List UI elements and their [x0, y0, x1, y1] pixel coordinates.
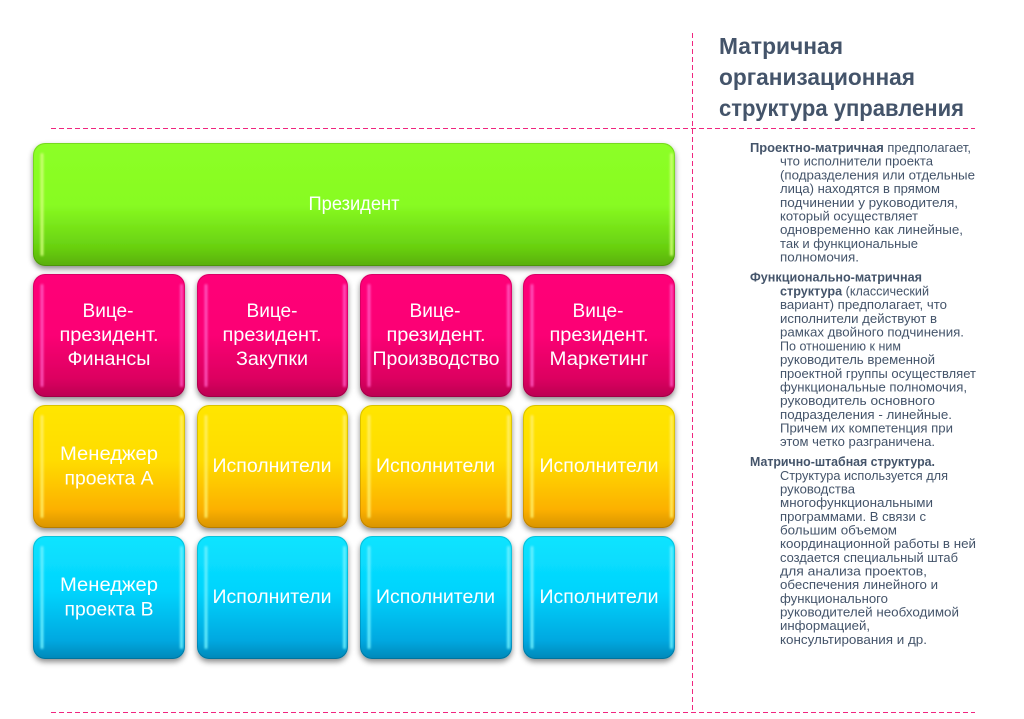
box: Project manager B [33, 536, 185, 659]
box: Executors row B col 4 [523, 536, 675, 659]
box: VP Production: президент. [386, 325, 486, 346]
box: Project manager A [33, 405, 185, 528]
box: President: Президент [308, 194, 400, 215]
text block: project matrix: полномочия. [780, 250, 859, 264]
text block: project matrix: одновременно как линейные, [780, 223, 963, 237]
text block: functional matrix [750, 270, 976, 449]
text block: functional matrix: вариант) предполагает, что [780, 298, 947, 312]
box: VP Finance: президент. [60, 325, 158, 346]
box: VP Finance: Финансы [68, 349, 150, 370]
box: Project manager A: Менеджер [60, 444, 158, 465]
box: VP Production [360, 274, 512, 397]
box: VP Purchasing: Вице- [246, 301, 298, 322]
text block: functional matrix: Функционально-матричная [750, 270, 922, 284]
text block: matrix-staff: консультирования и др. [780, 633, 927, 647]
title: организационная [719, 64, 915, 90]
text block: matrix-staff: руководителей необходимой [780, 606, 959, 620]
box: Executors row B col 2 [197, 536, 348, 659]
text block: matrix-staff: функционального [780, 592, 888, 606]
box: VP Marketing [523, 274, 675, 397]
text block: functional matrix: функциональные полномочия, [780, 380, 967, 394]
text block: functional matrix: руководитель временной [780, 353, 935, 367]
text block: matrix-staff: программами. В связи с [780, 510, 926, 524]
text block: matrix-staff: большим объемом [780, 524, 897, 538]
box: Executors row A col 3: Исполнители [376, 456, 495, 477]
text block: functional matrix: рамках двойного подчинения. [780, 326, 964, 340]
text block: functional matrix: По отношению к ним [780, 340, 901, 354]
box: VP Finance [33, 274, 185, 397]
text block: project matrix: который осуществляет [780, 210, 918, 224]
text block: functional matrix: Причем их компетенция при [780, 422, 953, 436]
box: Executors row A col 3 [360, 405, 512, 528]
text block: project matrix: (подразделения или отдельные [780, 168, 975, 182]
box: VP Marketing: Вице- [572, 301, 624, 322]
title: Матричная [719, 33, 843, 59]
text block: matrix-staff: координационной работы в ней [780, 537, 976, 551]
title: структура управления [719, 95, 964, 121]
box: VP Purchasing: президент. [222, 325, 322, 346]
box: Executors row B col 2: Исполнители [212, 587, 332, 608]
text block: project matrix: лица) находятся в прямом [780, 182, 940, 196]
text block: project matrix: что исполнители проекта [780, 154, 933, 168]
text block: functional matrix: подразделения - линейные. [780, 408, 952, 422]
box: Executors row A col 2: Исполнители [212, 456, 332, 477]
text block: functional matrix: проектной группы осуществляет [780, 367, 976, 381]
title [719, 33, 964, 121]
text block: functional matrix: руководитель основного [780, 394, 935, 408]
text block: project matrix [750, 141, 975, 264]
box: Project manager A: проекта А [64, 468, 154, 490]
box: Executors row B col 3: Исполнители [376, 587, 495, 608]
box: Executors row B col 4: Исполнители [540, 587, 658, 608]
box: Executors row A col 4 [523, 405, 675, 528]
box: President [33, 143, 675, 266]
text block: project matrix: Проектно-матричная предполагает, [750, 141, 971, 155]
text block: matrix-staff: создается специальный штаб [780, 551, 958, 565]
text block: matrix-staff: Структура используется для [780, 469, 948, 483]
text block: functional matrix: этом четко разграничена. [780, 435, 935, 449]
box: VP Marketing: президент. [550, 325, 648, 346]
text block: functional matrix: структура (классический [780, 284, 929, 298]
text block: project matrix: подчинении у руководителя, [780, 196, 958, 210]
box: VP Production: Производство [372, 349, 500, 370]
box: VP Production: Вице- [410, 301, 460, 322]
box: Executors row A col 2 [197, 405, 348, 528]
box: VP Finance: Вице- [82, 301, 134, 322]
box: Project manager B: Менеджер [60, 575, 158, 596]
text block: matrix-staff [750, 455, 976, 647]
box: VP Purchasing: Закупки [236, 349, 308, 370]
text block: matrix-staff: обеспечения линейного и [780, 578, 938, 592]
box: Executors row A col 4: Исполнители [540, 456, 658, 477]
text block: matrix-staff: информацией, [780, 619, 870, 633]
box: VP Purchasing [197, 274, 348, 397]
box: VP Marketing: Маркетинг [550, 349, 649, 370]
text block: matrix-staff: многофункциональными [780, 496, 933, 510]
box: Executors row B col 3 [360, 536, 512, 659]
box: Project manager B: проекта В [64, 600, 154, 620]
text block: matrix-staff: Матрично-штабная структура. [750, 455, 935, 469]
text block: matrix-staff: руководства [780, 482, 855, 496]
text block: matrix-staff: для анализа проектов, [780, 564, 927, 578]
text block: project matrix: так и функциональные [780, 237, 918, 251]
text block: functional matrix: исполнители действуют в [780, 312, 937, 326]
